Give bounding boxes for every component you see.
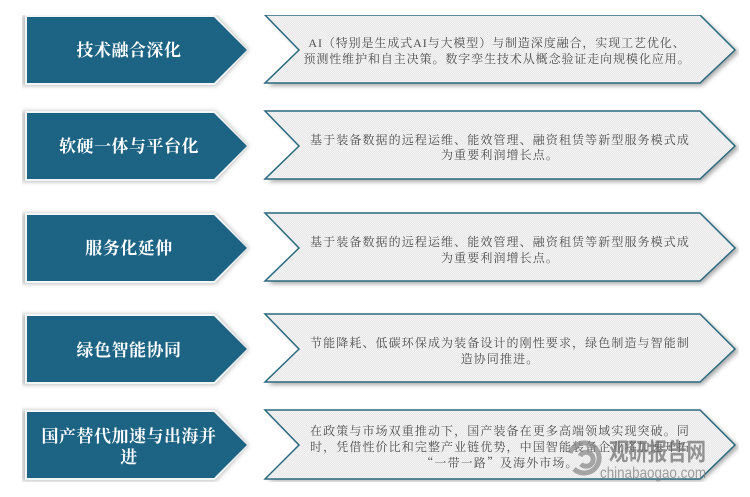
label arrow: 绿色智能协同: 绿色智能协同 xyxy=(76,340,182,360)
description chevron: 国产替代加速与出海并进: 在政策与市场双重推动下，国产装备在更多高端领域实现突破。同 xyxy=(310,423,690,438)
label arrow: 国产替代加速与出海并进 xyxy=(22,410,249,481)
label arrow: 软硬一体与平台化: 软硬一体与平台化 xyxy=(59,137,199,156)
label arrow: 绿色智能协同 xyxy=(22,314,249,385)
label arrow: 软硬一体与平台化 xyxy=(22,111,249,182)
description chevron: 服务化延伸: 基于装备数据的远程运维、能效管理、融资租赁等新型服务模式成 xyxy=(310,234,690,249)
description chevron: 绿色智能协同: 节能降耗、低碳环保成为装备设计的刚性要求，绿色制造与智能制 xyxy=(310,335,690,350)
description chevron: 技术融合深化: 预测性维护和自主决策。数字孪生技术从概念验证走向规模化应用。 xyxy=(303,51,691,66)
description chevron: 服务化延伸: 为重要利润增长点。 xyxy=(441,250,559,265)
description chevron: 软硬一体与平台化: 基于装备数据的远程运维、能效管理、融资租赁等新型服务模式成 xyxy=(310,132,690,147)
row 4 xyxy=(22,314,739,385)
description chevron: 软硬一体与平台化: 为重要利润增长点。 xyxy=(441,147,559,162)
description chevron: 技术融合深化: AI（特别是生成式AI与大模型）与制造深度融合，实现工艺优化、 xyxy=(308,35,686,50)
label arrow: 技术融合深化 xyxy=(22,15,249,86)
label arrow: 服务化延伸 xyxy=(22,213,249,284)
description chevron: 服务化延伸 xyxy=(265,213,739,284)
watermark url: chinabaogao.com xyxy=(600,465,706,482)
row 3 xyxy=(22,213,739,284)
row 1 xyxy=(22,15,739,86)
description chevron: 绿色智能协同 xyxy=(265,314,739,385)
label arrow: 技术融合深化: 技术融合深化 xyxy=(76,40,182,60)
watermark logo xyxy=(570,443,599,473)
label arrow: 国产替代加速与出海并进: 国产替代加速与出海并 xyxy=(42,426,216,446)
row 5 xyxy=(22,410,739,481)
description chevron: 国产替代加速与出海并进: 时，凭借性价比和完整产业链优势，中国智能装备企业将加速开拓 xyxy=(310,439,690,454)
watermark name: 观研报告网 xyxy=(609,439,706,466)
description chevron: 国产替代加速与出海并进: “一带一路”及海外市场。 xyxy=(421,454,579,471)
description chevron: 软硬一体与平台化 xyxy=(265,111,739,182)
description chevron: 技术融合深化 xyxy=(265,15,739,86)
description chevron: 绿色智能协同: 造协同推进。 xyxy=(461,351,539,366)
row 2 xyxy=(22,111,739,182)
description chevron: 国产替代加速与出海并进 xyxy=(265,410,739,481)
label arrow: 国产替代加速与出海并进: 进 xyxy=(120,448,138,467)
label arrow: 服务化延伸: 服务化延伸 xyxy=(85,238,173,258)
watermark: 观研报告网 chinabaogao.com xyxy=(570,439,706,482)
